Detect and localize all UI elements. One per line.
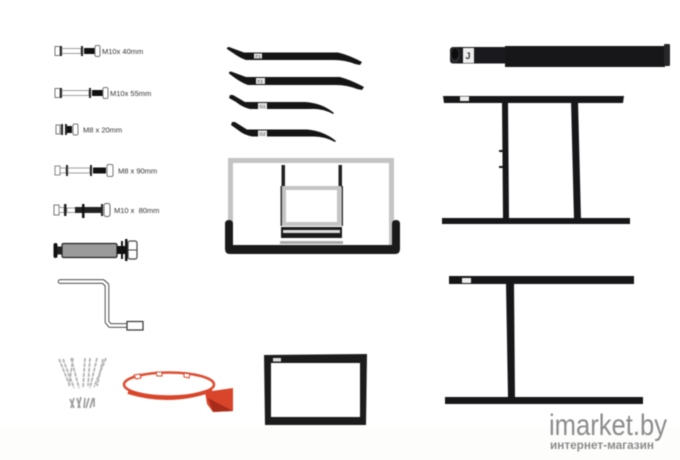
crank handle <box>60 282 143 330</box>
bolt M10x80mm: M10 x 80mm <box>114 206 159 215</box>
bolt M8x90mm: M8 x 90mm <box>118 166 157 176</box>
basketball net <box>59 358 106 408</box>
bolt M10x55mm <box>55 88 151 98</box>
handle grip with bolt <box>54 239 137 261</box>
black rectangular backboard frame <box>264 354 367 425</box>
support arm G1 <box>229 95 334 114</box>
backboard <box>225 160 400 254</box>
telescoping pole J <box>450 44 670 67</box>
support arm F1 <box>227 47 362 65</box>
support arm F1: F1 <box>256 54 261 59</box>
lower frame with one leg <box>445 276 643 404</box>
support arm G2 <box>231 122 336 142</box>
bolt M10x40mm <box>55 46 143 56</box>
upper frame with two legs <box>442 96 630 224</box>
bolt M10x55mm: M10x 55mm <box>110 89 151 98</box>
bolt M8x20mm: M8 x 20mm <box>83 126 122 134</box>
support arm F2: F2 <box>258 79 263 84</box>
bolt M8x90mm <box>55 164 157 176</box>
telescoping pole J: J <box>466 51 471 61</box>
watermark: интернет-магазин <box>550 440 654 452</box>
support arm G2: G2 <box>260 132 266 136</box>
orange basketball rim <box>124 372 233 412</box>
bolt M10x40mm: M10x 40mm <box>102 47 143 56</box>
bolt M10x80mm <box>54 204 159 218</box>
bolt M8x20mm <box>56 124 122 135</box>
support arm F2 <box>229 72 364 90</box>
support arm G1: G1 <box>260 104 266 109</box>
